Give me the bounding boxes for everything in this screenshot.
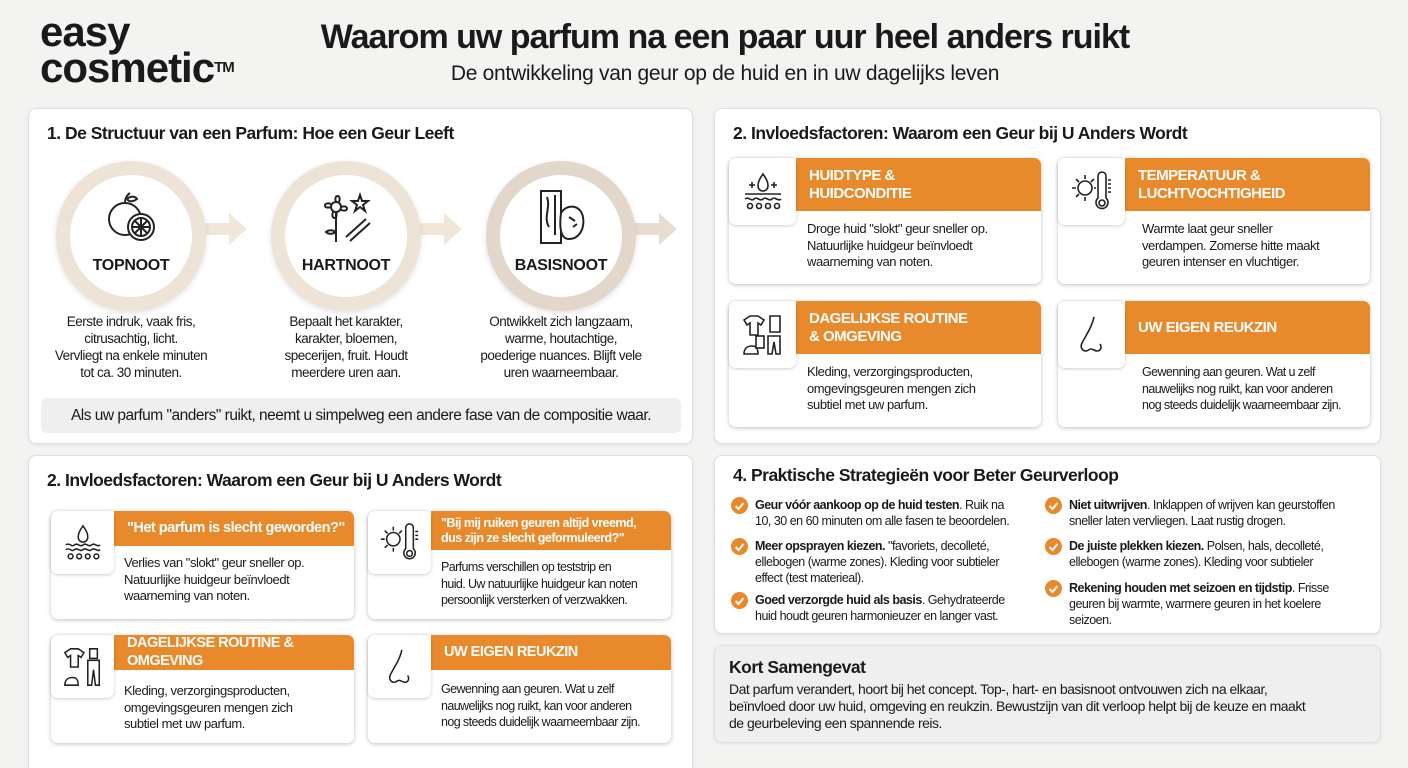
desc: basisnoot: Ontwikkelt zich langzaam, xyxy=(489,314,633,329)
card: dagelijkse routine: omgevingsgeuren mengen zich xyxy=(807,380,976,396)
subtitle: De ontwikkeling van geur op de huid en in uw dagelijks leven xyxy=(451,62,999,85)
tip 6 xyxy=(1045,580,1329,627)
card: vreemd: dus zijn ze slecht geformuleerd?" xyxy=(441,530,624,544)
card: reukzin xyxy=(368,635,671,743)
card: vreemd: "Bij mij ruiken geuren altijd vreemd, xyxy=(441,516,636,530)
tip 5: ellebogen (warme zones). Kleding voor subtieler xyxy=(1069,555,1313,569)
card: parfum slecht xyxy=(51,511,354,619)
card: routine xyxy=(51,635,354,743)
tip 2 xyxy=(731,538,1000,585)
tip 2: Meer opsprayen kiezen. "favoriets, decolleté, xyxy=(755,539,989,553)
heading: 2. Invloedsfactoren: Waarom een Geur bij U Anders Wordt xyxy=(47,470,501,490)
title: Waarom uw parfum na een paar uur heel anders ruikt xyxy=(321,18,1129,56)
circle: topnoot: TOPNOOT xyxy=(93,257,169,274)
tip 2: ellebogen (warme zones). Kleding voor subtieler xyxy=(755,555,999,569)
desc: topnoot: citrusachtig, licht. xyxy=(84,331,178,346)
card: routine: OMGEVING xyxy=(127,652,203,668)
heading: Kort Samengevat xyxy=(729,657,865,677)
callout bar xyxy=(41,398,681,433)
panel: strategies xyxy=(714,455,1381,634)
desc: hartnoot xyxy=(284,314,408,380)
logo: easy xyxy=(40,8,129,55)
circle: hartnoot xyxy=(271,161,421,311)
tip 3: Goed verzorgde huid als basis. Gehydrateerde xyxy=(755,593,1005,607)
circle: hartnoot: HARTNOOT xyxy=(302,257,390,274)
card: reukzin: nauwelijks nog ruikt, kan voor anderen xyxy=(441,698,632,712)
summary text xyxy=(729,681,1306,731)
logo xyxy=(40,8,234,91)
desc: hartnoot: meerdere uren aan. xyxy=(291,365,401,380)
tip 6: seizoen. xyxy=(1069,613,1112,627)
card: dagelijkse routine: & OMGEVING xyxy=(809,328,902,344)
desc: topnoot: Vervliegt na enkele minuten xyxy=(55,348,207,363)
tip 4: Niet uitwrijven. Inklappen of wrijven kan geurstoffen xyxy=(1069,498,1335,512)
card: huidtype: Droge huid "slokt" geur sneller op. xyxy=(807,221,988,236)
card: parfum slecht: Verlies van "slokt" geur sneller op. xyxy=(124,555,304,570)
card: temperatuur: TEMPERATUUR & xyxy=(1138,166,1260,184)
desc: basisnoot: warme, houtachtige, xyxy=(505,331,617,346)
card: temperatuur: LUCHTVOCHTIGHEID xyxy=(1138,184,1285,202)
arrow 3 xyxy=(634,213,677,245)
card: temperatuur xyxy=(1058,158,1370,284)
desc: hartnoot: specerijen, fruit. Houdt xyxy=(284,348,408,363)
panel: summary xyxy=(714,645,1381,743)
arrow 2 xyxy=(420,213,462,245)
desc: basisnoot: poederige nuances. Blijft vele xyxy=(480,348,642,363)
tip 1: Geur vóór aankoop op de huid testen. Ruik na xyxy=(755,498,1004,512)
summary text: de geurbeleving een spannende reis. xyxy=(729,715,942,731)
card: vreemd xyxy=(368,511,671,619)
tip 1 xyxy=(731,497,1009,528)
card: huidtype: Natuurlijke huidgeur beïnvloedt xyxy=(807,238,972,252)
arrow 1 xyxy=(204,213,247,245)
card: reukzin: Gewenning aan geuren. Wat u zelf xyxy=(441,682,614,696)
tip 6: Rekening houden met seizoen en tijdstip. Frisse xyxy=(1069,581,1329,595)
desc: hartnoot: Bepaalt het karakter, xyxy=(289,314,403,329)
card: vreemd: persoonlijk versterken of verzwakken. xyxy=(441,593,627,607)
card: vreemd: Parfums verschillen op teststrip en xyxy=(441,560,611,574)
tip 5: De juiste plekken kiezen. Polsen, hals, decolleté, xyxy=(1069,539,1323,553)
card: temperatuur: Warmte laat geur sneller xyxy=(1142,221,1272,236)
summary text: beïnvloed door uw huid, omgeving en reukzin. Bewustzijn van dit verloop helpt bij de keuze en maakt xyxy=(729,698,1305,714)
panel: influence factors left xyxy=(28,455,693,768)
logo: cosmeticTM xyxy=(40,44,234,91)
heading: 4. Praktische Strategieën voor Beter Geurverloop xyxy=(733,465,1118,485)
tip 2: effect (test materieal). xyxy=(755,571,864,585)
panel: influence factors right xyxy=(714,108,1381,444)
card: reukzin: nog steeds duidelijk waarneembaar zijn. xyxy=(1142,398,1341,412)
desc: basisnoot xyxy=(480,314,642,380)
card: routine: DAGELIJKSE ROUTINE & xyxy=(127,635,293,651)
card: routine: subtiel met uw parfum. xyxy=(124,716,245,731)
card: reukzin xyxy=(1058,301,1370,427)
card: huidtype: HUIDCONDITIE xyxy=(809,184,911,202)
card: routine: Kleding, verzorgingsproducten, xyxy=(124,683,290,698)
card: parfum slecht: waarneming van noten. xyxy=(124,588,250,603)
card: reukzin: nog steeds duidelijk waarneembaar zijn. xyxy=(441,715,640,729)
circle: basisnoot xyxy=(486,161,636,311)
heading: 2. Invloedsfactoren: Waarom een Geur bij U Anders Wordt xyxy=(733,123,1187,143)
card: reukzin: Gewenning aan geuren. Wat u zelf xyxy=(1142,365,1315,379)
tip 6: geuren bij warmte, warmere geuren in het koelere xyxy=(1069,597,1321,611)
tip 5 xyxy=(1045,538,1323,569)
circle: basisnoot: BASISNOOT xyxy=(515,257,607,274)
heading: 1. De Structuur van een Parfum: Hoe een Geur Leeft xyxy=(47,123,454,143)
card: routine: omgevingsgeuren mengen zich xyxy=(124,700,293,714)
card: huidtype xyxy=(729,158,1041,284)
card: parfum slecht: Natuurlijke huidgeur beïnvloedt xyxy=(124,572,289,586)
card: reukzin: UW EIGEN REUKZIN xyxy=(444,644,578,660)
desc: basisnoot: uren waarneembaar. xyxy=(504,365,618,380)
card: reukzin: UW EIGEN REUKZIN xyxy=(1138,318,1277,336)
tip 4: sneller laten vervliegen. Laat rustig drogen. xyxy=(1069,514,1286,528)
card: dagelijkse routine: DAGELIJKSE ROUTINE xyxy=(809,310,968,326)
card: dagelijkse routine: subtiel met uw parfum. xyxy=(807,397,928,412)
callout bar: Als uw parfum "anders" ruikt, neemt u simpelweg een andere fase van de compositie waar. xyxy=(71,407,651,424)
card: reukzin: nauwelijks nog ruikt, kan voor anderen xyxy=(1142,382,1333,396)
desc: topnoot: Eerste indruk, vaak fris, xyxy=(67,314,195,329)
summary text: Dat parfum verandert, hoort bij het concept. Top-, hart- en basisnoot ontvouwen zich na elkaar, xyxy=(729,681,1267,697)
desc: hartnoot: karakter, bloemen, xyxy=(295,331,397,346)
card: parfum slecht: "Het parfum is slecht geworden?" xyxy=(127,520,345,536)
panel: structure xyxy=(28,108,693,444)
card: dagelijkse routine: Kleding, verzorgingsproducten, xyxy=(807,364,973,379)
tip 1: 10, 30 en 60 minuten om alle fasen te beoordelen. xyxy=(755,514,1009,528)
tip 4 xyxy=(1045,497,1335,528)
desc: topnoot xyxy=(55,314,207,380)
tip 3 xyxy=(731,592,1005,623)
card: temperatuur: geuren intenser en vluchtiger. xyxy=(1142,254,1299,269)
card: huidtype: HUIDTYPE & xyxy=(809,166,895,184)
desc: topnoot: tot ca. 30 minuten. xyxy=(80,365,182,380)
card: temperatuur: verdampen. Zomerse hitte maakt xyxy=(1142,238,1319,252)
card: huidtype: waarneming van noten. xyxy=(807,254,933,269)
card: dagelijkse routine xyxy=(729,301,1041,427)
circle: topnoot xyxy=(56,161,206,311)
tip 3: huid houdt geuren harmonieuzer en langer vast. xyxy=(755,609,998,623)
card: vreemd: huid. Uw natuurlijke huidgeur kan noten xyxy=(441,576,637,590)
